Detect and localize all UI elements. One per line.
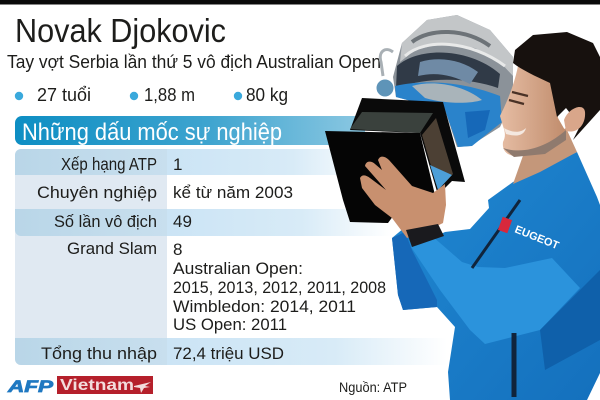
stat: weight: 80 kg [246, 85, 288, 105]
trophy body [393, 15, 513, 147]
table left column background [15, 149, 167, 365]
photo: ear [564, 107, 585, 132]
top black bar [0, 0, 600, 4]
trophy dark inner bowl [396, 53, 500, 88]
career table [15, 149, 447, 365]
logo: Vietnam: Vietnam [60, 377, 134, 394]
row: professional since [37, 183, 293, 202]
sleeve left shade [392, 232, 437, 310]
row: professional since: Chuyên nghiệp [37, 183, 157, 202]
stat: height: 1,88 m [144, 85, 195, 105]
stat: age: 27 tuổi [37, 85, 91, 105]
row: Grand Slam: Australian Open: [173, 259, 303, 278]
row: titles: Số lần vô địch [54, 212, 157, 231]
jacket red badge [498, 217, 512, 233]
row: Grand Slam: Wimbledon: 2014, 2011 [173, 297, 356, 316]
photo: trophy box [325, 98, 465, 223]
photo: trophy [376, 15, 513, 147]
trophy lower blue [395, 82, 502, 147]
row: ATP ranking: Xếp hạng ATP [61, 154, 157, 174]
row: total earnings: 72,4 triệu USD [173, 344, 284, 363]
photo: player neck and face [500, 65, 577, 184]
smile [504, 128, 526, 136]
row: total earnings: Tổng thu nhập [41, 344, 157, 363]
jacket sponsor label: EUGEOT [513, 224, 561, 252]
key stats [15, 85, 288, 105]
row: Grand Slam: US Open: 2011 [173, 315, 287, 334]
photo: hands and watch [360, 157, 446, 247]
trophy left handle [380, 50, 393, 76]
logo: Vietnam [57, 376, 153, 394]
row: Grand Slam: 2015, 2013, 2012, 2011, 2008 [173, 278, 386, 297]
section heading bar: Những dấu mốc sự nghiệp [22, 119, 282, 146]
row: Grand Slam [67, 239, 386, 334]
subtitle: Tay vợt Serbia lần thứ 5 vô địch Australian Open [7, 52, 381, 72]
row: professional since: kể từ năm 2003 [173, 183, 293, 202]
row: Grand Slam: 8 [173, 240, 182, 259]
forearm [411, 236, 580, 344]
row: ATP ranking: 1 [173, 155, 182, 174]
photo: player jacket [392, 152, 600, 400]
row: titles: 49 [173, 212, 192, 231]
logo: AFP: AFP [7, 377, 54, 396]
row: titles [15, 209, 392, 236]
photo: player hair [513, 32, 600, 140]
trophy upper rim [400, 15, 513, 76]
row: ATP ranking [15, 149, 377, 175]
box side picture [422, 118, 453, 190]
eye and brow [509, 92, 528, 104]
beard shadow [503, 130, 566, 157]
row: Grand Slam: Grand Slam [67, 239, 157, 258]
row: total earnings [15, 338, 447, 365]
title: Novak Djokovic [15, 12, 226, 49]
source note: Nguồn: ATP [339, 380, 407, 395]
